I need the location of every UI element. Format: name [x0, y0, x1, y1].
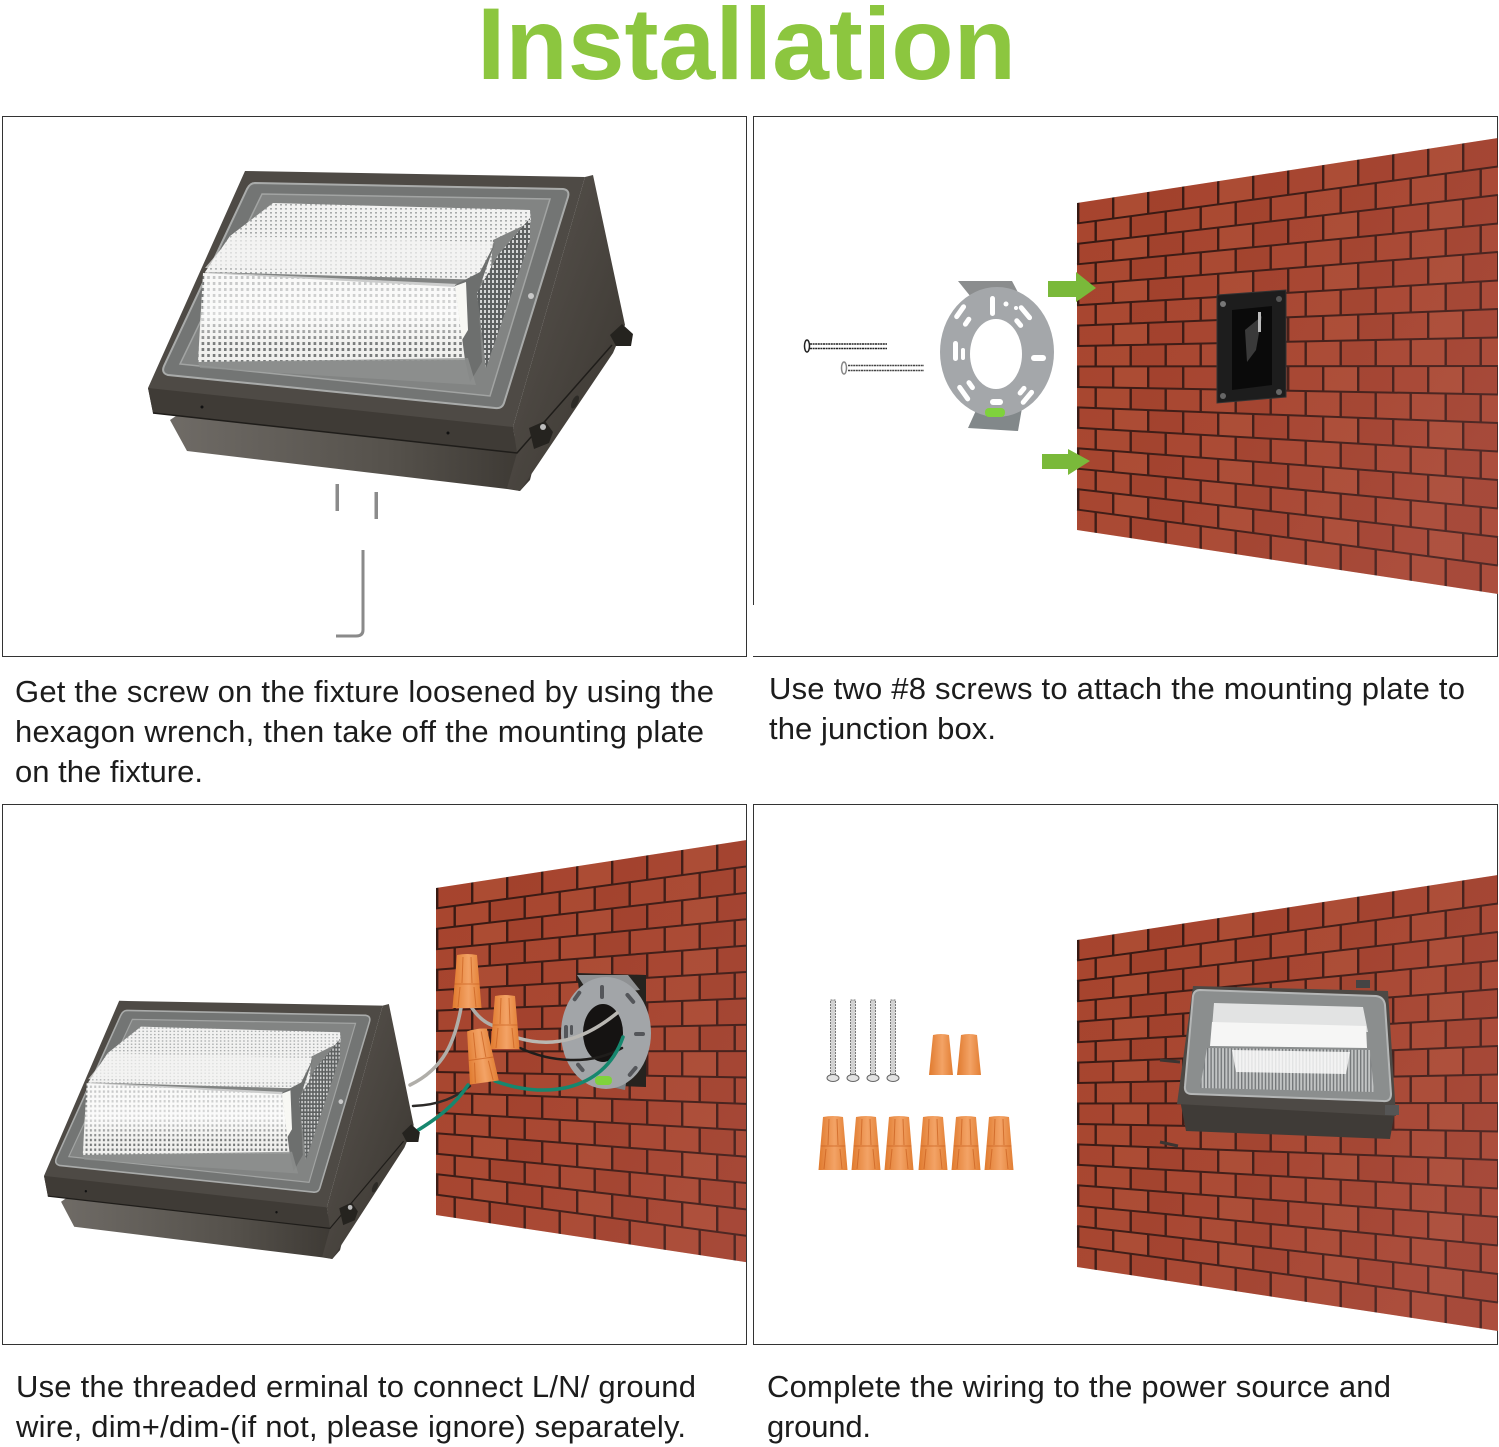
wires — [410, 1008, 623, 1132]
icon: long screws — [804, 340, 924, 374]
icon: mounting plate — [940, 281, 1054, 431]
instruction text: step 1: Get the screw on the fixture loosened by using the — [15, 674, 714, 709]
brick wall — [1077, 138, 1498, 594]
icon: two screws — [336, 484, 378, 519]
icon: two small wire nuts — [929, 1034, 981, 1075]
arrow: lower green arrow — [1042, 449, 1090, 475]
instruction text: step 4 — [767, 1369, 1391, 1444]
icon: wall pack fixture — [148, 171, 633, 491]
instruction text: step 2: the junction box. — [769, 711, 996, 746]
arrow: upper green arrow — [1048, 272, 1096, 302]
panel frame — [2, 116, 746, 656]
icon: mounting plate on wall — [561, 973, 651, 1090]
instruction text: step 1: on the fixture. — [15, 754, 203, 789]
icon: four screws — [827, 1000, 899, 1082]
panel: step 3 connect wires — [2, 804, 747, 1345]
instruction text: step 3: Use the threaded erminal to connect L/N/ ground — [16, 1369, 696, 1404]
instruction text: step 3: wire, dim+/dim-(if not, please ignore) separately. — [15, 1409, 686, 1444]
icon: wire nut 1 — [452, 954, 482, 1008]
icon: junction box — [1217, 290, 1286, 403]
panel frame — [754, 804, 1498, 1344]
icon: wire nut 3 — [463, 1027, 499, 1085]
brick wall — [1077, 875, 1498, 1331]
icon: six large wire nuts — [818, 1116, 1014, 1170]
instruction text: step 4: ground. — [767, 1409, 871, 1444]
icon: stray wall marks — [1160, 1060, 1180, 1146]
icon: wire nut 2 — [490, 995, 520, 1049]
instruction text: step 2: Use two #8 screws to attach the mounting plate to — [769, 671, 1465, 706]
panel: step 1 remove mounting plate — [2, 116, 746, 656]
instruction text: step 4: Complete the wiring to the power source and — [767, 1369, 1391, 1404]
brick wall — [436, 840, 746, 1262]
instruction text: step 1: hexagon wrench, then take off the mounting plate — [15, 714, 704, 749]
icon: hexagon wrench — [336, 550, 363, 636]
panel frame — [2, 804, 746, 1344]
instruction text: step 2 — [769, 671, 1465, 746]
panel: step 2 attach mounting plate — [753, 116, 1498, 656]
instruction text: step 3 — [15, 1369, 696, 1444]
panel frame — [753, 116, 1498, 656]
icon: mounted wall pack fixture — [1177, 980, 1399, 1139]
panel: step 4 complete wiring — [754, 804, 1498, 1344]
instruction text: step 1 — [15, 674, 714, 789]
icon: wall pack fixture — [44, 1001, 420, 1259]
